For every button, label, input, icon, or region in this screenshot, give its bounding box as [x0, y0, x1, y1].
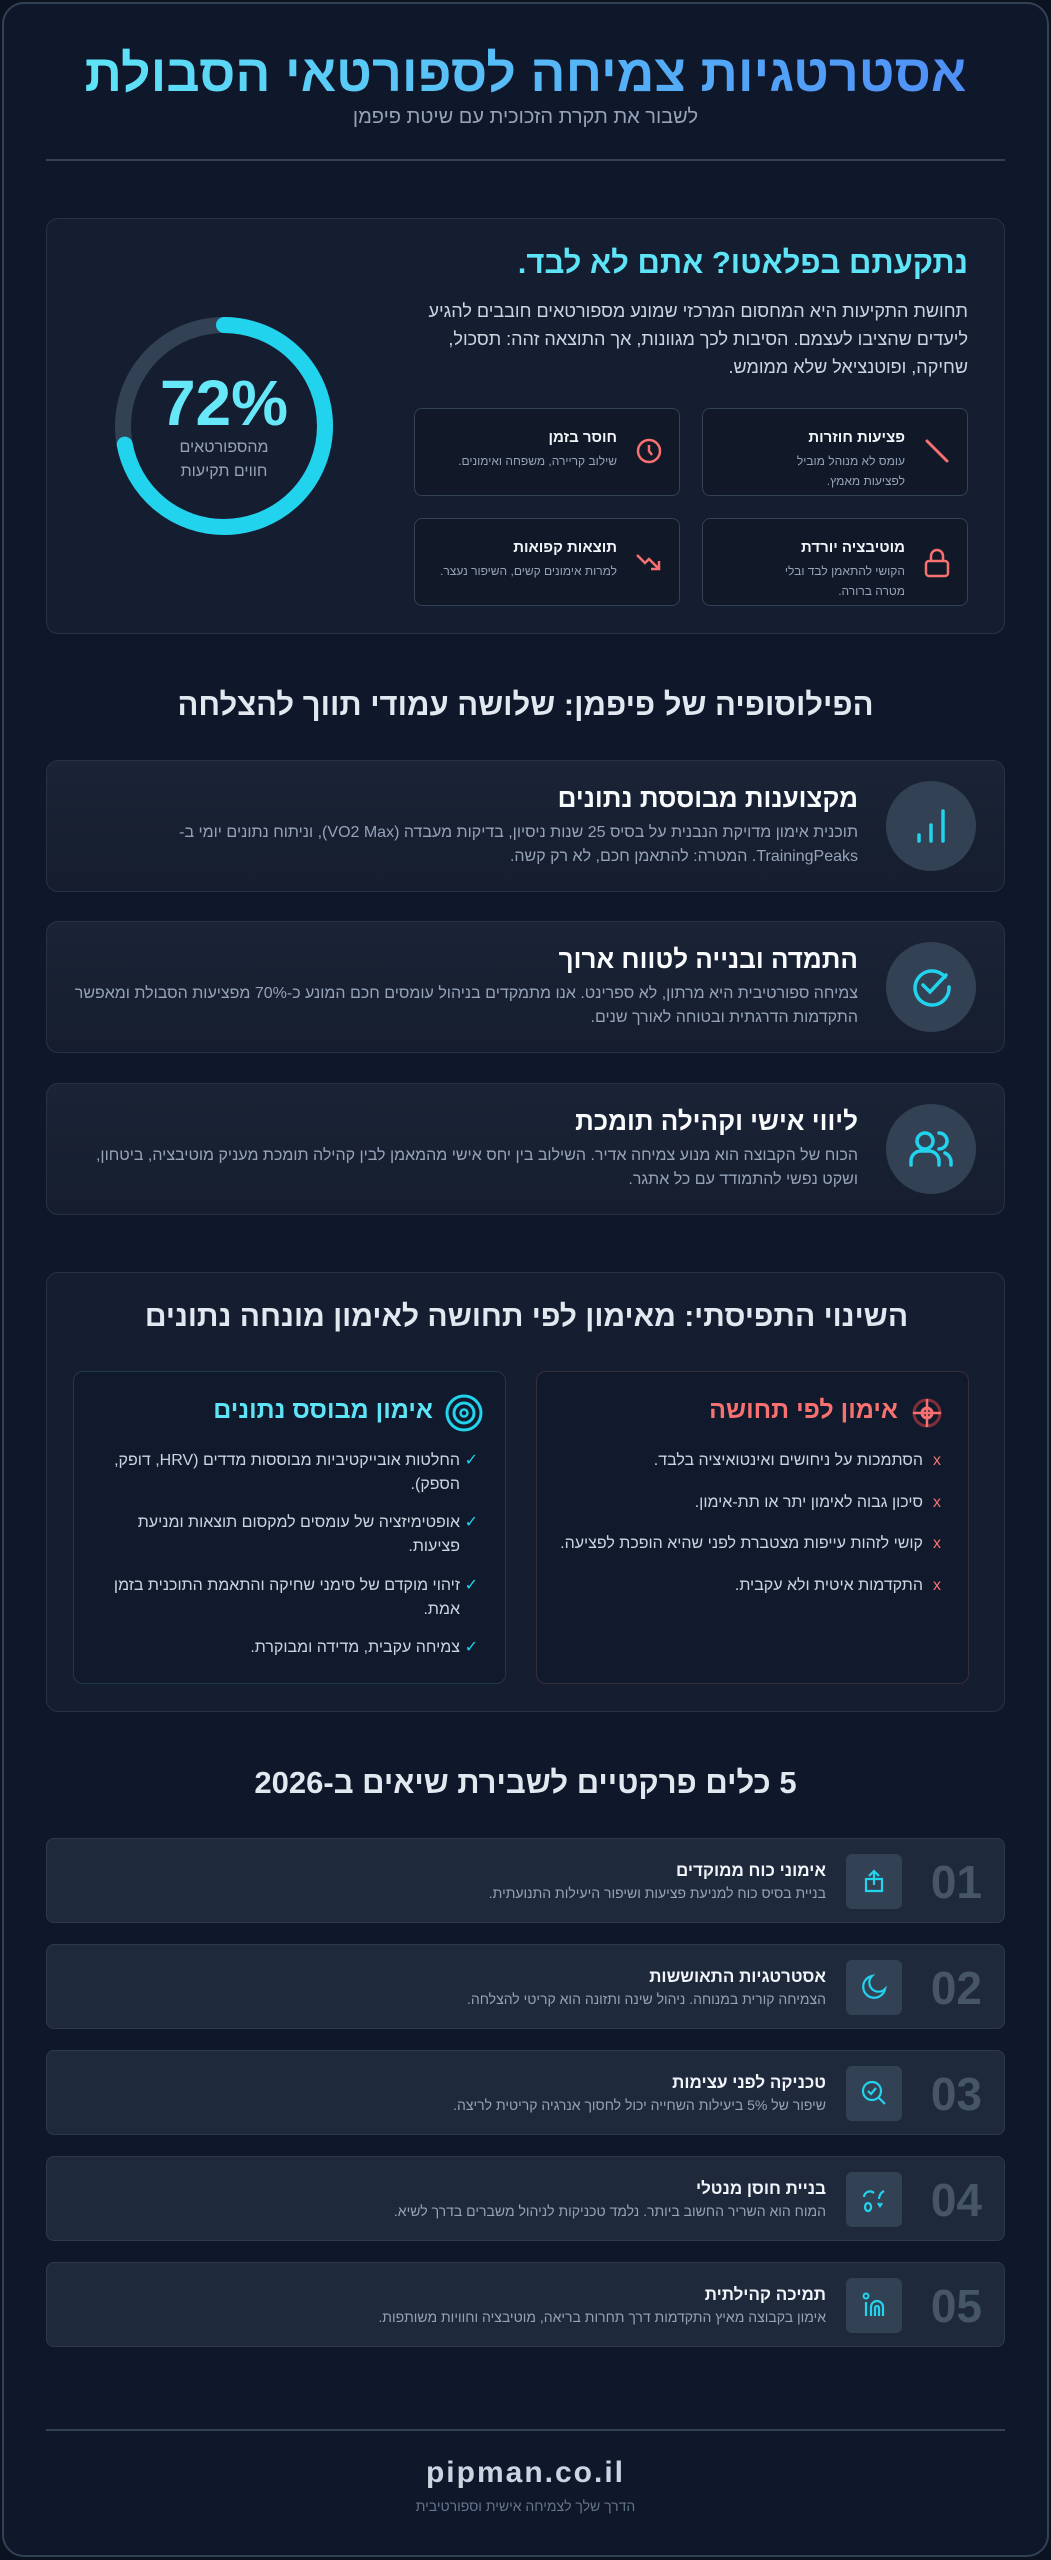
- tool 01: 01: [931, 1856, 982, 1908]
- icon: moon: [846, 1960, 902, 2015]
- heading: plateau: נתקעתם בפלאטו? אתם לא לבד.: [518, 245, 968, 280]
- panel: pillar data: מקצוענות מבוססת נתונים: [558, 783, 858, 813]
- card: time: שילוב קריירה, משפחה ואימונים.: [458, 454, 617, 468]
- heading: 5 tools: 5 כלים פרקטיים לשבירת שיאים ב-2026: [254, 1765, 797, 1800]
- icon: users: [886, 1104, 976, 1194]
- card: feeling-based: הסתמכות על ניחושים ואינטואיציה בלבד.: [654, 1452, 923, 1469]
- tool 03: 03: [931, 2068, 982, 2120]
- card: data-driven: [73, 1371, 506, 1684]
- chart: donut 72%: חווים תקיעות: [181, 463, 267, 480]
- tool 02: הצמיחה קורית במנוחה. ניהול שינה ותזונה הוא קריטי להצלחה.: [467, 1991, 826, 2007]
- panel: paradigm shift: [46, 1272, 1005, 1712]
- heading: philosophy: הפילוסופיה של פיפמן: שלושה עמודי תווך להצלחה: [177, 687, 874, 722]
- footer: pipman.co.il: [426, 2456, 625, 2489]
- card: time: [414, 408, 680, 496]
- card: data-driven: אימון מבוסס נתונים: [213, 1396, 433, 1424]
- icon: community: [846, 2278, 902, 2333]
- panel: pillar consistency: [46, 921, 1005, 1053]
- tool 03: [46, 2050, 1005, 2135]
- card: feeling-based: אימון לפי תחושה: [709, 1396, 898, 1424]
- chart: donut 72%: [115, 317, 333, 535]
- tool 05: 05: [931, 2280, 982, 2332]
- footer: הדרך שלך לצמיחה אישית וספורטיבית: [416, 2498, 635, 2514]
- tool 04: 04: [931, 2174, 982, 2226]
- panel: pillar consistency: התמדה ובנייה לטווח ארוך: [559, 944, 858, 974]
- icon: mind: [846, 2172, 902, 2227]
- tool 01: בניית בסיס כוח למניעת פציעות ושיפור היעילות התנועתית.: [489, 1885, 826, 1901]
- card: feeling-based: קושי לזהות עייפות מצטברת לפני שהיא הופכת לפציעה.: [560, 1535, 923, 1552]
- panel: plateau: [46, 218, 1005, 634]
- card: motivation: [702, 518, 968, 606]
- panel: pillar community: [46, 1083, 1005, 1215]
- card: data-driven: זיהוי מוקדם של סימני שחיקה והתאמת התוכנית בזמן אמת.: [114, 1577, 460, 1618]
- icon: search check: [846, 2066, 902, 2121]
- chart: donut 72%: 72%: [160, 367, 288, 439]
- panel: pillar data: תוכנית אימון מדויקת הנבנית על בסיס 25 שנות ניסיון, בדיקות מעבדה (VO2 Max), וניתוח נתונים יומי ב-TrainingPeaks. המטרה: להתאמן חכם, לא רק קשה.: [179, 824, 858, 865]
- card: feeling-based: התקדמות איטית ולא עקבית.: [735, 1577, 923, 1594]
- card: data-driven: החלטות אובייקטיביות מבוססות מדדים (HRV, דופק, הספק).: [114, 1452, 460, 1493]
- panel: pillar data: [46, 760, 1005, 892]
- chart: donut 72%: מהספורטאים: [179, 439, 269, 456]
- tool 04: בניית חוסן מנטלי: [696, 2179, 826, 2198]
- title: אסטרטגיות צמיחה לספורטאי הסבולת: [85, 45, 966, 103]
- card: feeling-based: x: [933, 1452, 941, 1469]
- tool 01: [46, 1838, 1005, 1923]
- icon: strength: [846, 1854, 902, 1909]
- tool 04: [46, 2156, 1005, 2241]
- tool 03: טכניקה לפני עצימות: [672, 2073, 826, 2092]
- panel: pillar community: הכוח של הקבוצה הוא מנוע צמיחה אדיר. השילוב בין יחס אישי מהמאמן לבין קהילה תומכת מעניק מוטיבציה, ביטחון, ושקט נפשי להתמודד עם כל אתגר.: [96, 1147, 858, 1188]
- panel: pillar consistency: צמיחה ספורטיבית היא מרתון, לא ספרינט. אנו מתמקדים בניהול עומסים חכם המונע כ-70% מפציעות הסבולת ומאפשר התקדמות הדרגתית ובטוחה לאורך שנים.: [75, 985, 858, 1026]
- card: results: למרות אימונים קשים, השיפור נעצר.: [440, 564, 617, 578]
- text block: plateau intro: תחושת התקיעות היא המחסום המרכזי שמונע מספורטאים חובבים להגיע ליעדים שהציבו לעצמם. הסיבות לכך מגוונות, אך התוצאה זהה: תסכול, שחיקה, ופוטנציאל שלא ממומש.: [429, 301, 968, 377]
- card: feeling-based: סיכון גבוה לאימון יתר או תת-אימון.: [695, 1494, 923, 1511]
- tool 05: אימון בקבוצה מאיץ התקדמות דרך תחרות בריאה, מוטיבציה וחוויות משותפות.: [378, 2309, 826, 2325]
- tool 02: 02: [931, 1962, 982, 2014]
- card: injuries: עומס לא מנוהל מוביל לפציעות מאמץ.: [797, 454, 905, 488]
- card: feeling-based: x: [933, 1535, 941, 1552]
- card: data-driven: ✓: [465, 1452, 478, 1469]
- tool 02: אסטרטגיות התאוששות: [649, 1967, 826, 1986]
- card: data-driven: ✓: [465, 1577, 478, 1594]
- subtitle: לשבור את תקרת הזכוכית עם שיטת פיפמן: [353, 106, 698, 128]
- tool 03: שיפור של 5% ביעילות השחייה יכול לחסוך אנרגיה קריטית לריצה.: [453, 2097, 826, 2113]
- footer: [416, 2456, 635, 2514]
- tool 01: אימוני כוח ממוקדים: [676, 1861, 826, 1880]
- card: time: חוסר בזמן: [548, 429, 617, 446]
- card: motivation: הקושי להתאמן לבד ובלי מטרה ברורה.: [785, 564, 905, 598]
- card: data-driven: אופטימיזציה של עומסים למקסום תוצאות ומניעת פציעות.: [138, 1514, 460, 1555]
- card: feeling-based: x: [933, 1494, 941, 1511]
- tool 04: המוח הוא השריר החשוב ביותר. נלמד טכניקות לניהול משברים בדרך לשיא.: [394, 2203, 826, 2219]
- card: data-driven: ✓: [465, 1639, 478, 1656]
- card: motivation: מוטיבציה יורדת: [801, 539, 905, 556]
- card: feeling-based: x: [933, 1577, 941, 1594]
- icon: check circle: [886, 942, 976, 1032]
- card: data-driven: צמיחה עקבית, מדידה ומבוקרת.: [250, 1639, 460, 1656]
- icon: crosshair: [912, 1398, 942, 1428]
- card: injuries: פציעות חוזרות: [808, 429, 905, 446]
- card: results: [414, 518, 680, 606]
- panel: pillar community: ליווי אישי וקהילה תומכת: [575, 1106, 858, 1136]
- tool 05: תמיכה קהילתית: [705, 2285, 826, 2304]
- tool 02: [46, 1944, 1005, 2029]
- heading: paradigm: השינוי התפיסתי: מאימון לפי תחושה לאימון מונחה נתונים: [145, 1300, 908, 1333]
- icon: bars: [886, 781, 976, 871]
- icon: target: [446, 1394, 482, 1432]
- card: injuries: [702, 408, 968, 496]
- tool 05: [46, 2262, 1005, 2347]
- card: feeling-based: [536, 1371, 969, 1684]
- card: data-driven: ✓: [465, 1514, 478, 1531]
- card: results: תוצאות קפואות: [513, 539, 617, 556]
